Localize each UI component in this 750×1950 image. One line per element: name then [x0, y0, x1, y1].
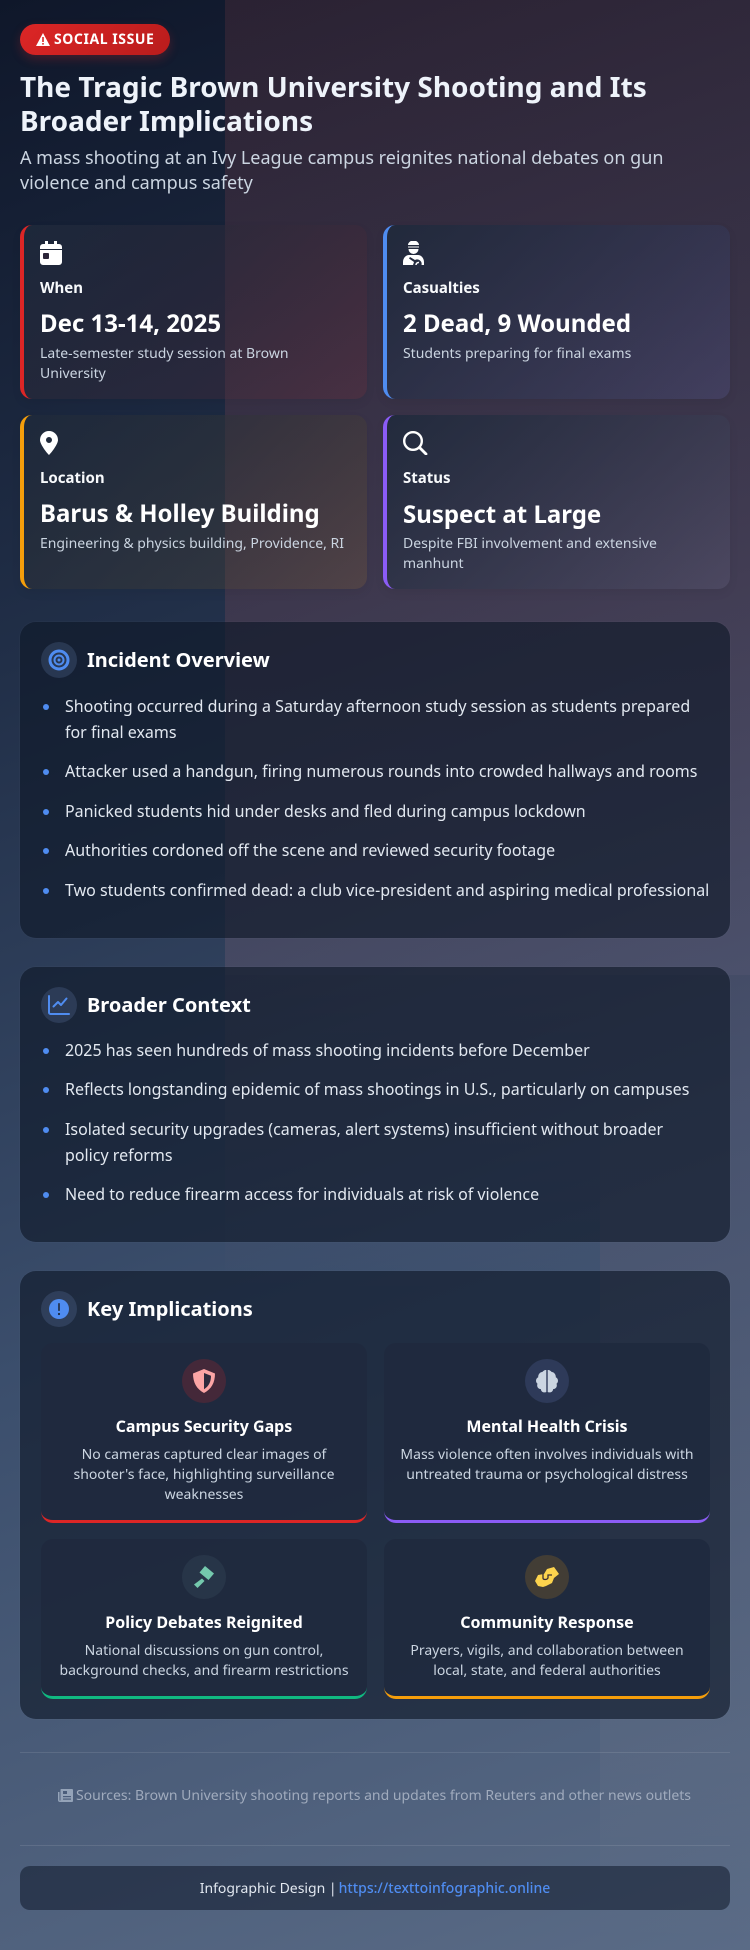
panel: incident overview	[20, 622, 730, 938]
heading: Incident Overview	[87, 646, 270, 673]
list item: Panicked students hid under desks and fled during campus lockdown	[65, 800, 586, 822]
heading: Key Implications	[87, 1295, 253, 1322]
icon: brain	[525, 1359, 569, 1403]
list item: Two students confirmed dead: a club vice-president and aspiring medical professional	[65, 879, 709, 901]
icon: calendar	[40, 241, 62, 265]
description: Students preparing for final exams	[403, 344, 631, 363]
card text: Prayers, vigils, and collaboration between local, state, and federal authorities	[410, 1641, 684, 1680]
list item: Isolated security upgrades (cameras, alert systems) insufficient without broader policy reforms	[65, 1118, 663, 1166]
panel: broader context	[20, 967, 730, 1242]
icon: warning triangle	[36, 33, 50, 46]
card: campus security gaps	[41, 1343, 367, 1523]
description: Despite FBI involvement and extensive manhunt	[403, 534, 657, 573]
label: When	[40, 278, 83, 298]
description: Late-semester study session at Brown University	[40, 344, 288, 383]
title: The Tragic Brown University Shooting and Its Broader Implications	[20, 68, 647, 140]
sources text: Sources: Brown University shooting reports and updates from Reuters and other news outlets	[76, 1786, 691, 1805]
label: Casualties	[403, 278, 480, 298]
value: Suspect at Large	[403, 498, 601, 531]
subtitle: A mass shooting at an Ivy League campus reignites national debates on gun violence and campus safety	[20, 146, 663, 195]
value: Barus & Holley Building	[40, 497, 320, 530]
value: Dec 13-14, 2025	[40, 307, 221, 340]
icon: injured person	[403, 241, 424, 265]
card: community response	[384, 1539, 710, 1699]
badge label: SOCIAL ISSUE	[54, 30, 154, 49]
icon: map pin	[40, 431, 58, 455]
card: mental health crisis	[384, 1343, 710, 1523]
card title: Campus Security Gaps	[116, 1415, 292, 1437]
card text: No cameras captured clear images of shooter's face, highlighting surveillance weaknesses	[73, 1445, 335, 1504]
label: Location	[40, 468, 105, 488]
card: policy debates reignited	[41, 1539, 367, 1699]
icon: target	[41, 642, 77, 678]
icon: newspaper	[58, 1789, 73, 1802]
list item: 2025 has seen hundreds of mass shooting incidents before December	[65, 1039, 590, 1061]
icon: gavel	[182, 1555, 226, 1599]
sources note	[58, 1786, 691, 1805]
panel: location	[20, 415, 367, 589]
badge: social issue	[20, 24, 170, 55]
footer bar	[20, 1866, 730, 1910]
icon: line chart	[41, 987, 77, 1023]
description: Engineering & physics building, Providence, RI	[40, 534, 344, 553]
footer bar: Infographic Design |https://texttoinfographic.online	[200, 1879, 550, 1898]
value: 2 Dead, 9 Wounded	[403, 307, 631, 340]
card text: Mass violence often involves individuals with untreated trauma or psychological distress	[400, 1445, 694, 1484]
list item: Attacker used a handgun, firing numerous rounds into crowded hallways and rooms	[65, 760, 697, 782]
background tint: lower right	[600, 975, 750, 1950]
background tint: upper right	[225, 0, 750, 975]
icon: handshake	[525, 1555, 569, 1599]
card text: National discussions on gun control, background checks, and firearm restrictions	[59, 1641, 349, 1680]
background tint: mid band right of thirty percent	[225, 975, 600, 1295]
card title: Policy Debates Reignited	[105, 1611, 303, 1633]
panel: status	[383, 415, 730, 589]
panel: when	[20, 225, 367, 399]
list item: Reflects longstanding epidemic of mass shootings in U.S., particularly on campuses	[65, 1078, 689, 1100]
label: Status	[403, 468, 451, 488]
heading: Broader Context	[87, 991, 251, 1018]
card title: Mental Health Crisis	[466, 1415, 628, 1437]
list item: Need to reduce firearm access for individuals at risk of violence	[65, 1183, 539, 1205]
icon: exclamation circle	[41, 1291, 77, 1327]
card title: Community Response	[460, 1611, 634, 1633]
list item: Shooting occurred during a Saturday afternoon study session as students prepared for final exams	[65, 695, 690, 743]
icon: shield	[182, 1359, 226, 1403]
panel: key implications	[20, 1271, 730, 1719]
panel: casualties	[383, 225, 730, 399]
list item: Authorities cordoned off the scene and reviewed security footage	[65, 839, 555, 861]
icon: magnifying glass	[403, 431, 428, 455]
